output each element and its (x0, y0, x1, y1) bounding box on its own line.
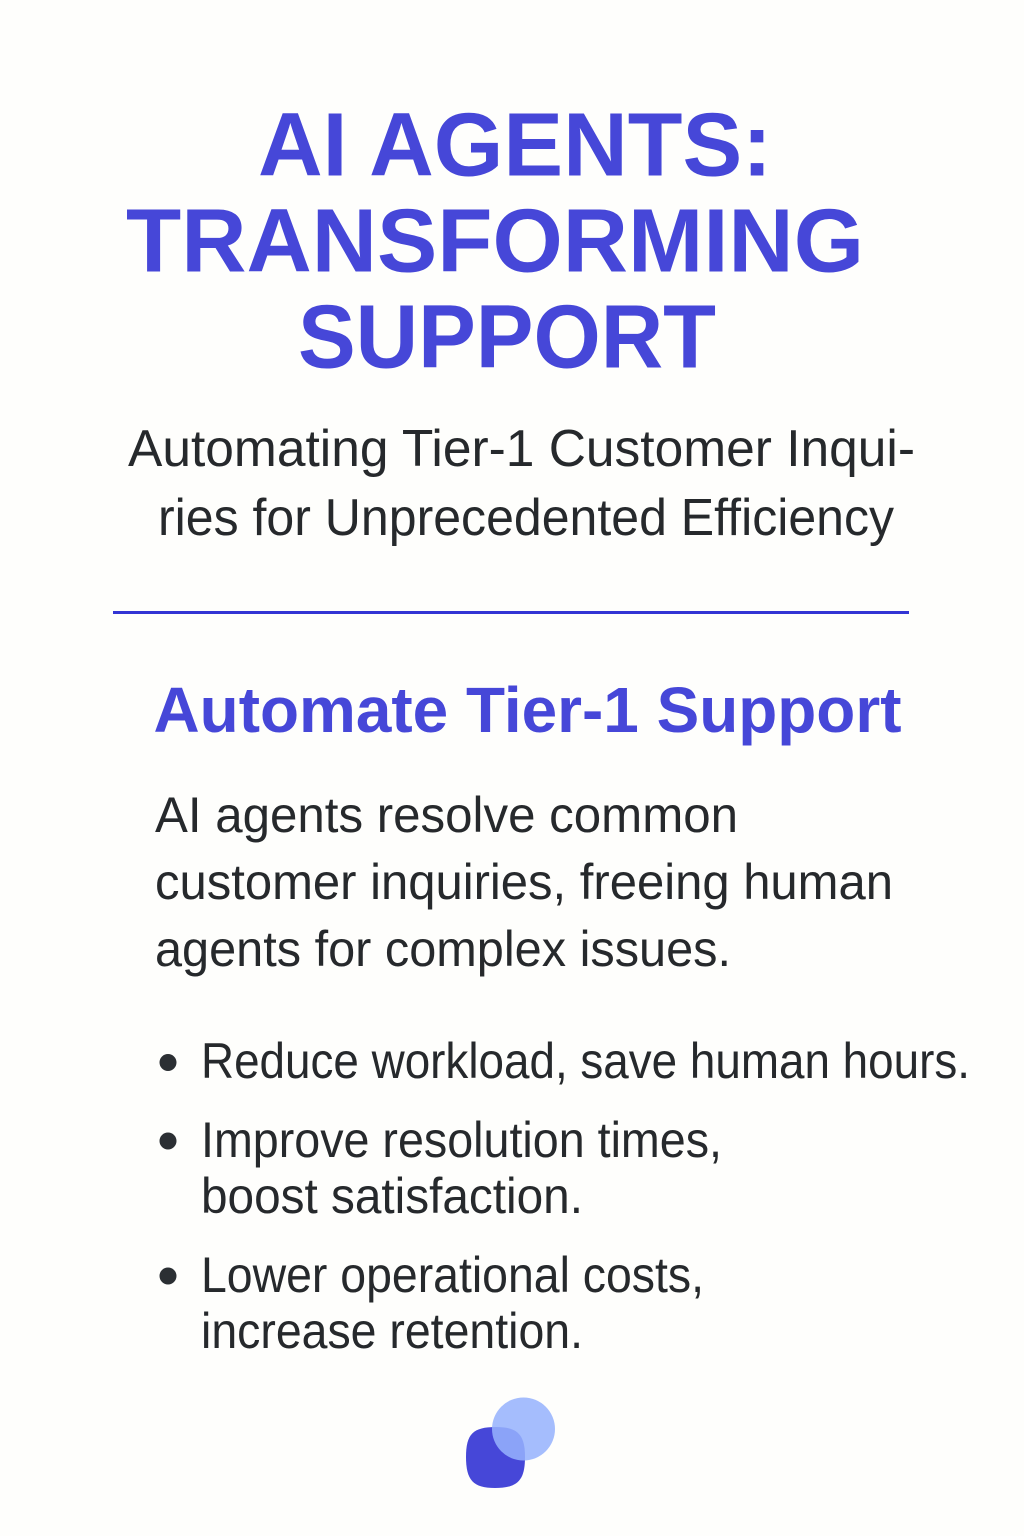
subtitle: ries for Unprecedented Efficiency (158, 489, 894, 547)
bullet: improve resolution: boost satisfaction. (201, 1168, 583, 1224)
body paragraph: customer inquiries, freeing human (155, 854, 893, 910)
bullet: lower costs: increase retention. (201, 1303, 583, 1359)
body paragraph (155, 787, 893, 977)
subtitle: Automating Tier-1 Customer Inqui- (128, 420, 915, 478)
body paragraph: AI agents resolve common (155, 787, 738, 843)
bullet: improve resolution: Improve resolution times, (201, 1112, 722, 1168)
icon: overlapping logo shapes (466, 1398, 555, 1488)
title: SUPPORT (298, 288, 716, 388)
title: TRANSFORMING (126, 192, 864, 292)
bullet: lower costs (160, 1247, 704, 1359)
bullet: improve resolution (160, 1112, 722, 1224)
bullet: reduce workload: Reduce workload, save human hours. (201, 1033, 970, 1089)
bullet list (160, 1033, 970, 1359)
bullet: lower costs: Lower operational costs, (201, 1247, 704, 1303)
title (126, 96, 864, 388)
body paragraph: agents for complex issues. (155, 921, 731, 977)
title: AI AGENTS: (258, 96, 772, 196)
section heading: Automate Tier-1 Support (154, 674, 902, 746)
subtitle (128, 420, 915, 547)
